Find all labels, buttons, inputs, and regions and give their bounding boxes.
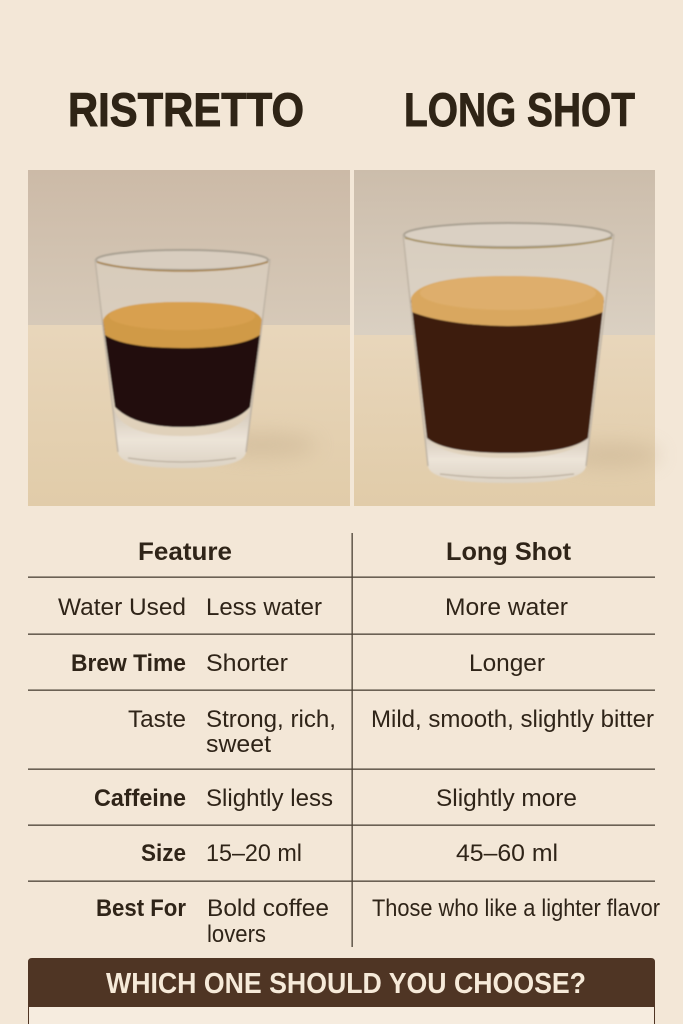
row: brew time: Longer xyxy=(469,650,545,677)
row: caffeine: Slightly more xyxy=(436,785,577,812)
row: taste xyxy=(128,706,654,758)
row: best for: Best For xyxy=(96,895,186,922)
banner heading: WHICH ONE SHOULD YOU CHOOSE? xyxy=(106,968,586,1000)
row: brew time xyxy=(71,650,545,677)
row: taste: Mild, smooth, slightly bitter xyxy=(371,706,654,733)
table header row xyxy=(138,538,572,566)
row: water used xyxy=(58,594,568,621)
row: best for: Bold coffee xyxy=(207,895,329,922)
row: size xyxy=(141,840,558,867)
icon: ristretto glass xyxy=(95,250,270,468)
panel: ristretto photo xyxy=(28,170,350,506)
row: caffeine: Slightly less xyxy=(206,785,333,812)
row: brew time: Brew Time xyxy=(71,650,186,677)
title: Ristretto: RISTRETTO xyxy=(68,83,304,136)
panel: which one should you choose xyxy=(28,958,655,1024)
row: caffeine: Caffeine xyxy=(94,785,186,812)
row: best for: Those who like a lighter flavor xyxy=(372,895,660,922)
table header row: Feature xyxy=(138,538,232,566)
row: brew time: Shorter xyxy=(206,650,288,677)
row: best for: lovers xyxy=(207,921,266,948)
row: taste: Strong, rich, xyxy=(206,706,336,733)
row: taste: Taste xyxy=(128,706,186,733)
row: best for xyxy=(96,895,660,948)
row: size: Size xyxy=(141,840,186,867)
row: size: 15–20 ml xyxy=(206,840,302,867)
icon: long shot glass xyxy=(403,223,614,483)
row: water used: Water Used xyxy=(58,594,186,621)
row: water used: More water xyxy=(445,594,568,621)
table header row: Long Shot xyxy=(446,538,572,566)
row: taste: sweet xyxy=(206,731,271,758)
panel: long shot photo xyxy=(354,170,660,506)
row: caffeine xyxy=(94,785,577,812)
row: size: 45–60 ml xyxy=(456,840,558,867)
row: water used: Less water xyxy=(206,594,322,621)
comparison table xyxy=(28,533,660,948)
title: Long Shot: LONG SHOT xyxy=(404,83,635,136)
